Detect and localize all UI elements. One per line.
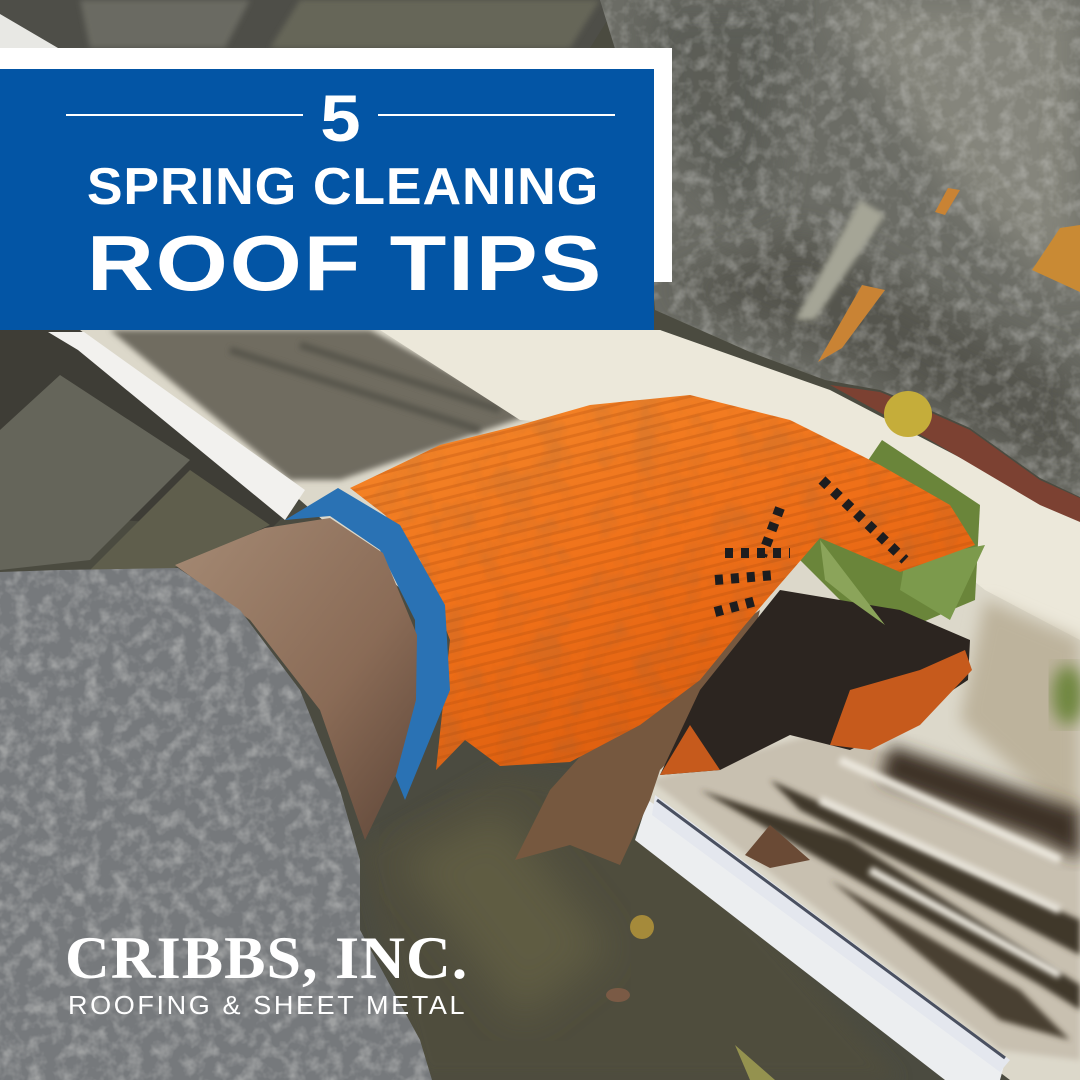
forearm [175,518,417,840]
right rule beside number [378,114,615,116]
gutter interior [80,330,1080,1080]
left rule beside number [66,114,303,116]
logo tagline: ROOFING & SHEET METAL [68,990,467,1020]
company logo [65,925,468,1020]
orange glove [340,390,990,775]
lichen patches [795,188,1080,437]
title number: 5 [320,81,361,155]
leaves in hand [515,440,985,868]
white offset frame behind banner [0,48,672,282]
title line: spring cleaning: SPRING CLEANING [87,158,599,216]
blue glove cuff [285,488,450,800]
grey sweater sleeve [0,565,440,1080]
logo name: CRIBBS, INC. [65,925,468,991]
banner: title [0,69,654,330]
title line: roof tips: ROOF TIPS [87,219,603,307]
white gutter rim [48,332,1010,1080]
upper roof sheet [600,0,1080,522]
top-left roof strip [0,0,620,48]
